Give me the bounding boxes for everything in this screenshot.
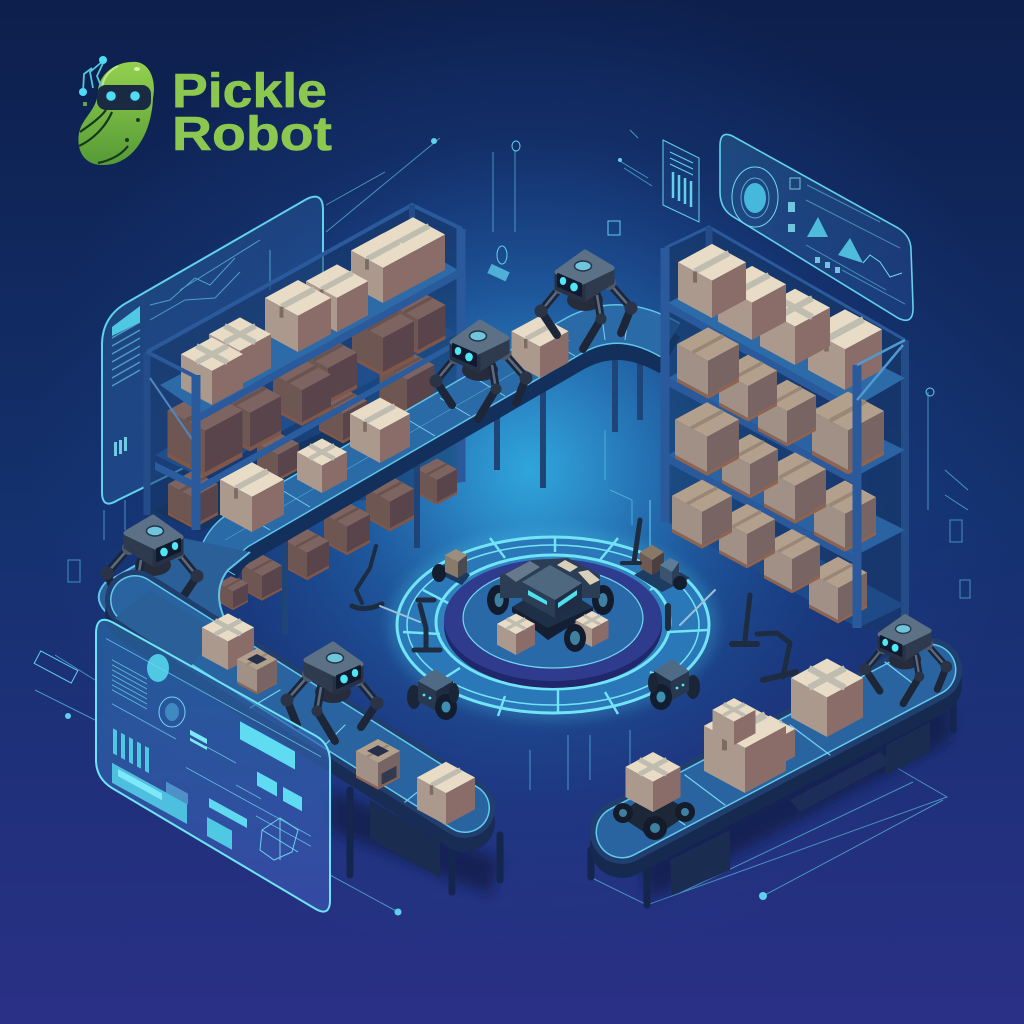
robot: upper conveyor right (534, 252, 638, 349)
central robot (487, 558, 614, 640)
rack level 4 boxes (672, 480, 867, 623)
rack deck level 2 (155, 312, 457, 477)
rack level 1 boxes (181, 217, 445, 405)
logo wordmark (172, 65, 332, 161)
panel: upper-right hologram (720, 134, 913, 320)
rack level 1 boxes (678, 244, 882, 390)
boxes on lower-right conveyor (704, 659, 863, 793)
rack deck 2 (668, 355, 905, 477)
rack deck 3 (668, 432, 905, 556)
central boxes (497, 611, 608, 655)
conveyor bend platform (99, 538, 250, 668)
logo wordmark: Pickle (172, 65, 327, 118)
conveyor: lower right (591, 662, 953, 905)
robot: upper conveyor middle (430, 322, 532, 419)
rack deck level 1 (160, 248, 458, 413)
cart with box (613, 752, 695, 840)
rack level 3 boxes (675, 402, 876, 552)
wheeled carrier with cube (432, 549, 470, 585)
boxes beneath the upper conveyor (218, 458, 457, 610)
rack level 3 boxes (168, 350, 434, 528)
panel: lower-left hologram (96, 620, 330, 912)
floor circuit lines (35, 130, 968, 912)
rack deck 1 (668, 280, 905, 407)
robot arms (352, 520, 796, 680)
logo wordmark: Robot (172, 108, 332, 161)
central platform (388, 529, 718, 721)
robot: conveyor bend (100, 517, 204, 614)
floor shadow under lower conveyors (330, 700, 950, 900)
robot: lower-right conveyor (860, 616, 952, 704)
left storage rack (147, 205, 462, 532)
rack level 2 boxes (168, 290, 446, 477)
boxes on lower-left conveyor (202, 613, 475, 825)
wheeled robots around the platform (407, 659, 700, 720)
rack level 2 boxes (677, 327, 884, 474)
conveyor: lower left (135, 600, 500, 892)
right storage rack (665, 227, 905, 632)
bend platform overlap (115, 590, 215, 668)
conveyor: upper line (200, 302, 670, 635)
rack deck 4 (668, 500, 905, 628)
robot: lower-left conveyor (280, 644, 384, 741)
logo: pickle robot mascot (78, 56, 154, 165)
icon: small data card (663, 140, 699, 222)
rack deck level 3 (153, 390, 450, 532)
boxes on the upper conveyor (220, 316, 568, 532)
panel: upper-left hologram (102, 197, 323, 504)
floor dots and small icons (34, 138, 970, 916)
wheeled carrier with box (634, 545, 690, 592)
